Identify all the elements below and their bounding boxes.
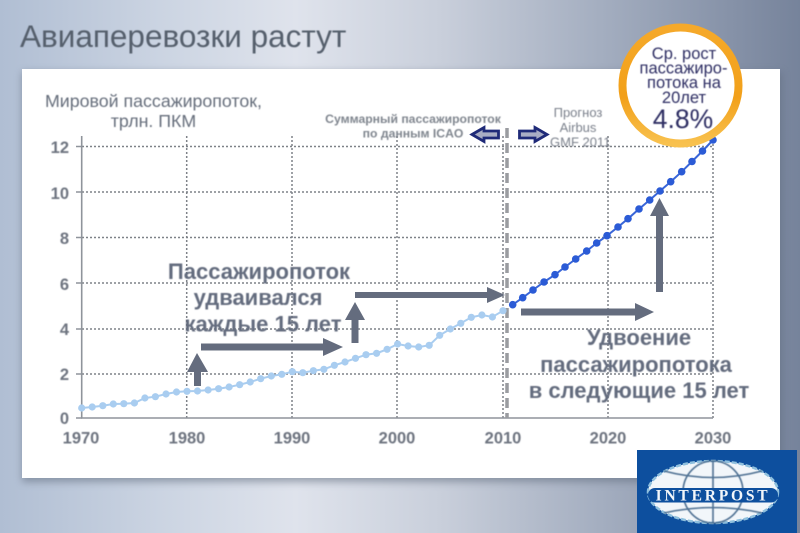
x-axis labels: 1990 — [274, 430, 310, 448]
x-axis labels: 2000 — [379, 430, 415, 448]
callout: average growth badge: потока на — [647, 74, 722, 92]
label: Airbus forecast: Airbus — [560, 120, 597, 135]
label: ICAO historical data: по данным ICAO — [363, 126, 463, 140]
callout: average growth badge: Ср. рост — [652, 45, 717, 63]
text: forecast doubling: Удвоение — [587, 325, 691, 350]
arrow: right 1996-2010 — [355, 287, 505, 303]
arrow: right to forecast — [520, 128, 547, 142]
arrow: up 1996 — [345, 302, 365, 343]
text: forecast doubling — [529, 325, 749, 403]
arrow: up 1981 — [187, 353, 208, 386]
y-axis title: трлн. ПКМ — [111, 111, 196, 131]
callout: average growth badge — [622, 28, 738, 144]
arrow: right 2011-2026 — [521, 303, 654, 321]
label: Airbus forecast: GMF 2011 — [550, 134, 610, 150]
y-axis labels: 6 — [60, 276, 69, 294]
title: Авиаперевозки растут — [20, 18, 346, 54]
y-axis labels: 8 — [60, 230, 69, 248]
arrow: left to ICAO data — [472, 128, 498, 142]
arrows: doubling history — [187, 198, 669, 386]
callout: average growth badge: 20лет — [662, 89, 707, 107]
forecast series — [509, 136, 717, 309]
x-axis labels: 1970 — [63, 430, 99, 448]
logo: Interpost: INTERPOST — [656, 488, 770, 504]
x-axis labels: 1980 — [169, 430, 205, 448]
x-axis labels: 2030 — [695, 430, 731, 448]
historical series — [78, 307, 507, 412]
y-axis labels: 2 — [60, 366, 69, 384]
text: forecast doubling: в следующие 15 лет — [529, 378, 749, 403]
y-axis title: Мировой пассажиропоток, — [45, 91, 262, 111]
text: history doubling: удваивался — [194, 285, 322, 310]
text: history doubling — [168, 259, 351, 336]
line chart — [45, 91, 731, 448]
divider: 2010 dashed line — [505, 128, 509, 418]
text: forecast doubling: пассажиропотока — [540, 352, 733, 377]
y-axis labels: 10 — [51, 185, 69, 203]
text: history doubling: Пассажиропоток — [168, 259, 351, 284]
x-axis labels — [63, 430, 731, 448]
label: ICAO historical data — [325, 112, 502, 140]
y-axis labels: 12 — [51, 139, 69, 157]
y-axis labels: 0 — [60, 410, 69, 428]
x-axis labels: 2010 — [485, 430, 521, 448]
label: Airbus forecast — [550, 105, 610, 150]
x-axis labels: 2020 — [590, 430, 626, 448]
label: ICAO historical data: Суммарный пассажиропоток — [325, 112, 502, 126]
y-axis labels — [51, 139, 70, 428]
y-axis title — [45, 91, 262, 131]
logo: Interpost — [637, 450, 797, 533]
axes — [76, 136, 713, 418]
gridlines — [82, 136, 713, 418]
callout: average growth badge: 4.8% — [653, 104, 713, 134]
callout: average growth badge: пассажиро- — [640, 60, 727, 78]
arrow: right 1981-1995 — [201, 338, 343, 356]
arrow: up 2025 — [650, 198, 669, 292]
text: history doubling: каждые 15 лет — [185, 312, 342, 336]
y-axis labels: 4 — [60, 321, 70, 339]
panel: chart background — [22, 69, 780, 478]
label: Airbus forecast: Прогноз — [554, 105, 602, 120]
